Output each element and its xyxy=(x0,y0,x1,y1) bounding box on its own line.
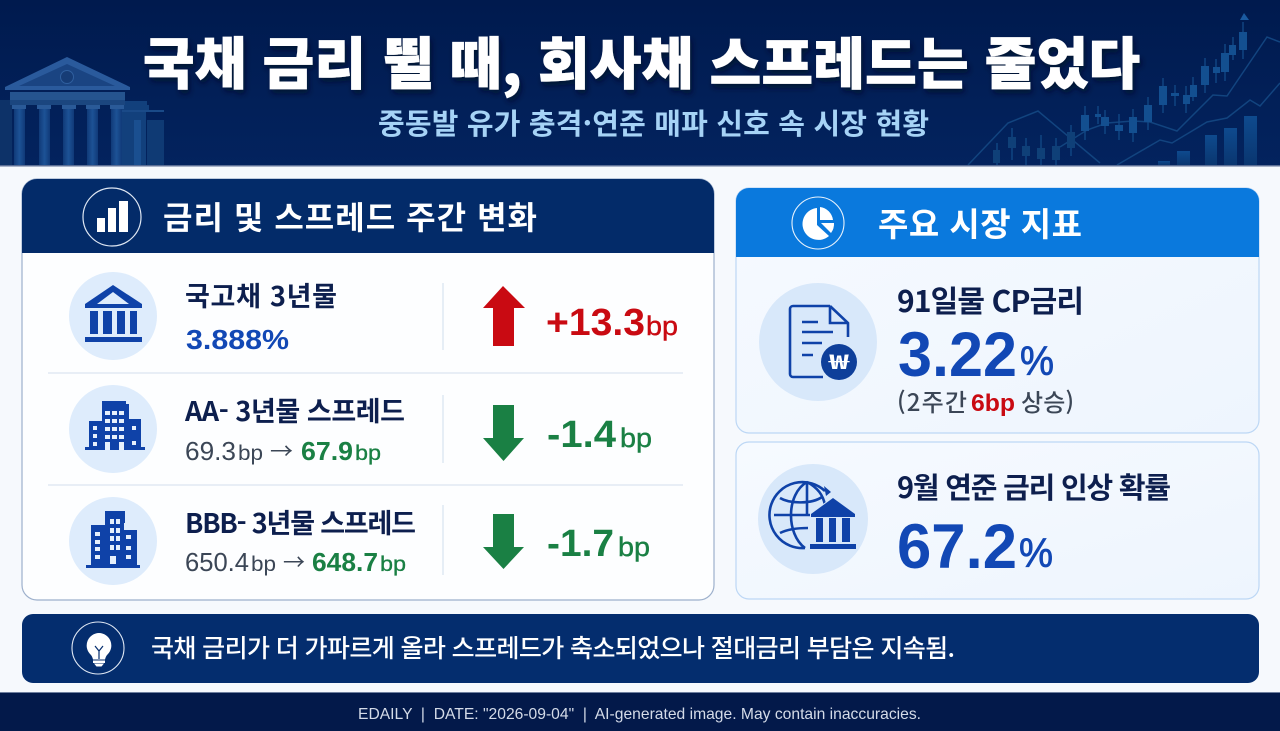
icon: document with won coin: ₩ xyxy=(827,346,851,375)
header banner xyxy=(0,0,1280,166)
label: 91일물 CP금리 xyxy=(897,277,1084,321)
value: 3.888% xyxy=(186,324,289,355)
change: +13.3bp: bp xyxy=(646,311,678,341)
before and after values: bp xyxy=(380,553,406,576)
panel header xyxy=(22,179,714,253)
panel: key market indicators xyxy=(736,188,1259,433)
note: 2-week change: 상승) xyxy=(1021,383,1074,418)
arrow: down xyxy=(483,514,524,569)
label: 국고채 3년물 xyxy=(185,275,337,314)
dividers xyxy=(48,283,683,575)
icon: bank xyxy=(69,272,157,360)
before and after values: bp xyxy=(355,442,381,465)
icon: office building xyxy=(69,385,157,473)
change: -1.7bp xyxy=(547,523,650,565)
before and after values: → xyxy=(270,434,293,466)
note: 2-week change: (2주간 xyxy=(897,383,967,418)
icon: bar chart xyxy=(83,188,141,246)
source note: EDAILY | DATE: "2026-09-04" | AI-generated image. May contain inaccuracies. xyxy=(358,706,921,723)
panel heading: 금리 및 스프레드 주간 변화 xyxy=(163,193,537,239)
panel header xyxy=(736,188,1259,257)
takeaway text: 국채 금리가 더 가파르게 올라 스프레드가 축소되었으나 절대금리 부담은 지속됨. xyxy=(151,629,955,665)
panel: weekly rate and spread changes xyxy=(22,179,714,600)
title: 국채 금리 뛸 때, 회사채 스프레드는 줄었다 xyxy=(143,20,1140,101)
before and after values: bp xyxy=(251,553,276,576)
value: 3.22%: 3.22 xyxy=(898,320,1017,390)
before and after values: → xyxy=(283,545,305,577)
row: BBB- 3-year spread xyxy=(69,497,650,585)
note: 2-week change: 6bp xyxy=(971,390,1015,417)
before and after values: 650.4 xyxy=(185,547,249,577)
icon: document with won coin xyxy=(759,283,877,401)
change: +13.3bp: +13.3 xyxy=(546,302,645,344)
footer bar xyxy=(0,692,1280,731)
subtitle: 중동발 유가 충격·연준 매파 신호 속 시장 현황 xyxy=(378,101,929,143)
panel heading: 주요 시장 지표 xyxy=(878,198,1082,246)
value: 67.2%: 67.2 xyxy=(897,512,1017,582)
value: 67.2%: % xyxy=(1019,530,1053,576)
arrow: down xyxy=(483,405,524,461)
illustration: market chart xyxy=(968,13,1280,165)
label: BBB- 3년물 스프레드 xyxy=(185,502,416,541)
before and after values: 67.9 xyxy=(301,436,353,466)
before and after values xyxy=(185,434,381,466)
arrow: up xyxy=(483,286,525,346)
icon: globe and bank xyxy=(758,464,868,574)
change: -1.7bp: bp xyxy=(618,532,650,562)
row: AA- 3-year spread xyxy=(69,385,652,473)
illustration: government building xyxy=(0,57,164,165)
note: 2-week change xyxy=(897,383,1074,418)
icon: pie chart xyxy=(792,197,844,249)
before and after values: bp xyxy=(238,442,263,465)
before and after values xyxy=(185,545,406,577)
before and after values: 648.7 xyxy=(312,547,378,577)
callout: takeaway xyxy=(22,614,1259,683)
change: -1.4bp xyxy=(547,414,652,456)
panel: Fed hike probability xyxy=(736,442,1259,599)
label: 9월 연준 금리 인상 확률 xyxy=(897,465,1171,507)
icon: tall buildings xyxy=(69,497,157,585)
change: -1.4bp: -1.4 xyxy=(547,414,616,456)
icon: light bulb xyxy=(72,622,124,674)
change: -1.4bp: bp xyxy=(620,423,652,453)
value: 3.22%: % xyxy=(1020,338,1054,384)
row: KTB 3-year xyxy=(69,272,678,360)
label: AA- 3년물 스프레드 xyxy=(184,390,405,429)
before and after values: 69.3 xyxy=(185,436,236,466)
change: -1.7bp: -1.7 xyxy=(547,523,614,565)
